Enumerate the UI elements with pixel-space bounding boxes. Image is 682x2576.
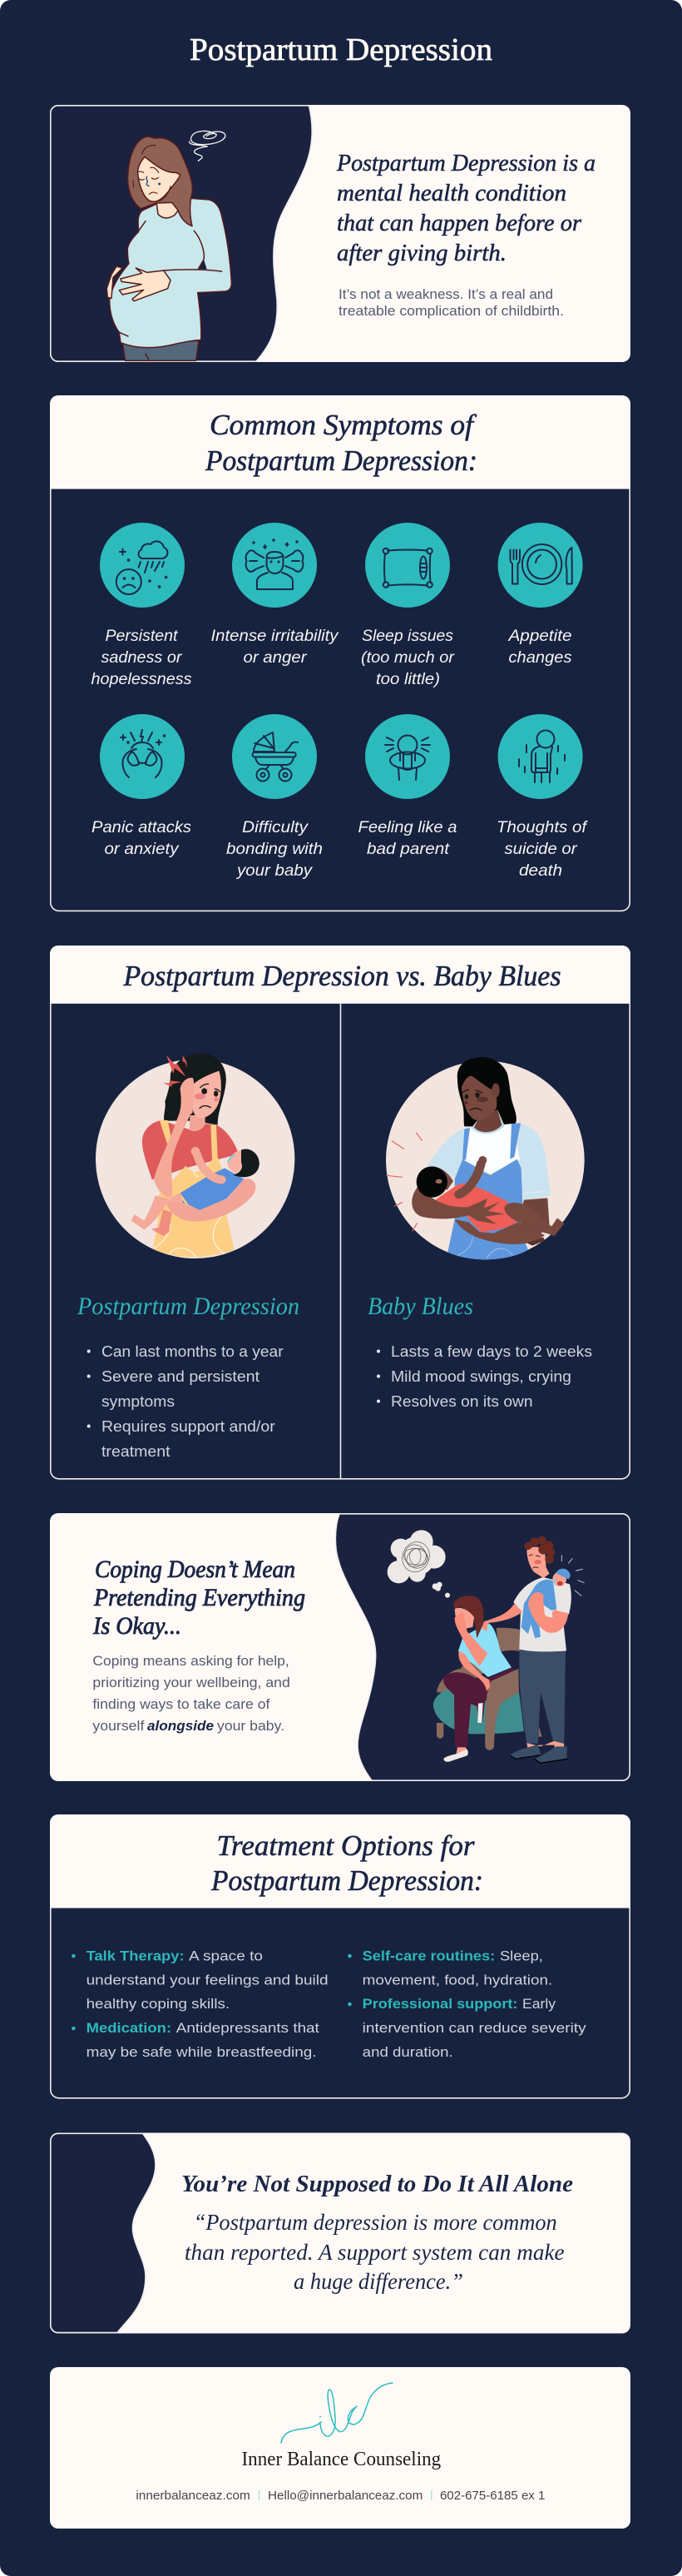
label: bonding with [226, 841, 323, 858]
coping text: yourself [92, 1719, 145, 1734]
label [497, 819, 588, 880]
label: (too much or [361, 649, 455, 667]
icon: angry person [246, 539, 303, 589]
bullet list: Resolves on its own [391, 1393, 532, 1410]
treatment list: right column: intervention can reduce severity [363, 2020, 586, 2036]
treatment list: left column: Medication: [86, 2020, 171, 2036]
symptom: sleep [361, 523, 455, 688]
label [211, 628, 339, 667]
treatment list: left column: A space to [189, 1948, 263, 1964]
symptom: bonding [226, 714, 323, 880]
bullet list: Lasts a few days to 2 weeks [391, 1343, 592, 1360]
label: sadness or [101, 649, 182, 667]
panel: support [50, 2132, 630, 2334]
symptom: panic [91, 714, 192, 858]
label: Difficulty [242, 819, 309, 836]
definition statement: after giving birth. [337, 240, 507, 266]
quote: “Postpartum depression is more common [194, 2210, 557, 2235]
treatment list: left column: understand your feelings and build [86, 1973, 329, 1988]
label: or anxiety [105, 841, 180, 858]
treatment list: left column: Talk Therapy: [86, 1948, 185, 1964]
thought bubble [388, 1530, 450, 1598]
panel: footer [50, 2367, 630, 2529]
label: Intense irritability [211, 628, 339, 645]
bullet list: treatment [101, 1443, 170, 1460]
heading: symptoms [205, 409, 477, 477]
label [507, 628, 572, 667]
heading: symptoms: Common Symptoms of [210, 409, 477, 441]
definition statement: mental health condition [337, 180, 566, 206]
coping text: your baby. [217, 1719, 284, 1734]
treatment list: left column: may be safe while breastfeeding. [86, 2044, 317, 2060]
panel: coping [50, 1513, 630, 1781]
panel: definition [50, 105, 630, 362]
label: Thoughts of [497, 819, 588, 836]
column: postpartum depression [77, 1293, 299, 1460]
icon: isolated figure [519, 731, 565, 782]
bullet list: symptoms [101, 1393, 175, 1410]
heading: coping: Is Okay... [92, 1612, 181, 1640]
label: too little) [376, 671, 440, 688]
icon: hands on head [121, 730, 165, 777]
contact details: Hello@innerbalanceaz.com [268, 2489, 423, 2503]
bullet list [87, 1343, 284, 1460]
coping text: prioritizing your wellbeing, and [92, 1675, 290, 1690]
heading: coping [92, 1556, 305, 1640]
icon: rain cloud and sad face [116, 541, 167, 594]
supporting text: It’s not a weakness. It’s a real and [339, 287, 553, 302]
logo: ibc monogram [281, 2383, 393, 2443]
quote [185, 2210, 565, 2294]
heading: symptoms: Postpartum Depression: [205, 444, 477, 477]
definition statement [336, 150, 596, 266]
contact details: innerbalanceaz.com [136, 2489, 250, 2503]
coping text: alongside [147, 1719, 214, 1734]
label [361, 628, 455, 688]
illustration: pregnant woman [106, 131, 231, 360]
label: or anger [243, 649, 307, 667]
column: baby blues [368, 1293, 592, 1410]
icon: person in hands [385, 736, 430, 780]
label: Sleep issues [362, 628, 454, 645]
bullet list: Mild mood swings, crying [391, 1368, 571, 1385]
panel: common symptoms [50, 395, 630, 911]
treatment list: right column [348, 1948, 586, 2060]
coping text: finding ways to take care of [92, 1697, 270, 1712]
label: changes [509, 649, 572, 667]
treatment list: right column: movement, food, hydration. [363, 1973, 552, 1988]
symptom: sadness [91, 523, 192, 688]
icon: plate and cutlery [511, 544, 572, 584]
heading: treatment: Treatment Options for [216, 1829, 475, 1862]
treatment list: right column: and duration. [363, 2044, 453, 2060]
label: Panic attacks [91, 819, 192, 836]
supporting text: treatable complication of childbirth. [339, 304, 564, 319]
bullet list [377, 1343, 592, 1410]
symptom: bad parent [358, 714, 457, 858]
contact details [136, 2489, 545, 2503]
symptom: appetite [498, 523, 583, 667]
treatment list: right column: Self-care routines: [363, 1948, 495, 1964]
title: Postpartum Depression [190, 32, 492, 67]
panel: comparison [50, 946, 630, 1479]
quote: a huge difference.” [294, 2269, 463, 2294]
label: death [519, 862, 562, 880]
coping text: Coping means asking for help, [92, 1654, 289, 1669]
label: Appetite [507, 628, 572, 645]
treatment list: right column: Early [522, 1996, 556, 2012]
panel: treatment options [50, 1814, 630, 2098]
icon: pillow [383, 548, 432, 588]
label: bad parent [367, 841, 450, 858]
label [91, 819, 192, 858]
bullet list: Can last months to a year [101, 1343, 284, 1360]
label: Persistent [105, 628, 178, 645]
coping text [92, 1654, 290, 1734]
heading: treatment: Postpartum Depression: [210, 1864, 483, 1897]
icon: baby stroller [253, 732, 298, 781]
illustration: mother with headache [96, 1054, 294, 1258]
treatment list: left column [72, 1948, 329, 2060]
quote: than reported. A support system can make [185, 2240, 565, 2265]
supporting text [339, 287, 564, 319]
label: your baby [235, 862, 314, 880]
bullet list: Severe and persistent [101, 1368, 259, 1385]
label [91, 628, 192, 688]
symptom: irritability [211, 523, 339, 667]
treatment list: right column: Sleep, [500, 1948, 543, 1964]
label: Feeling like a [358, 819, 457, 836]
label: hopelessness [91, 671, 192, 688]
column: baby blues: Baby Blues [368, 1293, 473, 1320]
heading: treatment [210, 1829, 483, 1897]
treatment list: right column: Professional support: [363, 1996, 517, 2012]
treatment list: left column: Antidepressants that [176, 2020, 319, 2036]
bullet list: Requires support and/or [101, 1418, 275, 1435]
column: postpartum depression: Postpartum Depression [77, 1293, 299, 1320]
logo wordmark: Inner Balance Counseling [241, 2448, 441, 2470]
symptom: dark thoughts [497, 714, 588, 880]
contact details: 602-675-6185 ex 1 [440, 2489, 545, 2503]
definition statement: Postpartum Depression is a [336, 150, 596, 176]
heading: support: You’re Not Supposed to Do It All Alone [181, 2171, 573, 2197]
heading: coping: Coping Doesn’t Mean [95, 1556, 295, 1583]
heading: comparison: Postpartum Depression vs. Baby Blues [123, 960, 561, 992]
illustration: parents with baby [388, 1530, 585, 1763]
illustration: mother with crying baby [386, 1057, 585, 1259]
label [226, 819, 323, 880]
label: suicide or [504, 841, 577, 858]
definition statement: that can happen before or [337, 210, 582, 236]
heading: coping: Pretending Everything [93, 1584, 305, 1611]
label [358, 819, 457, 858]
treatment list: left column: healthy coping skills. [86, 1996, 230, 2012]
